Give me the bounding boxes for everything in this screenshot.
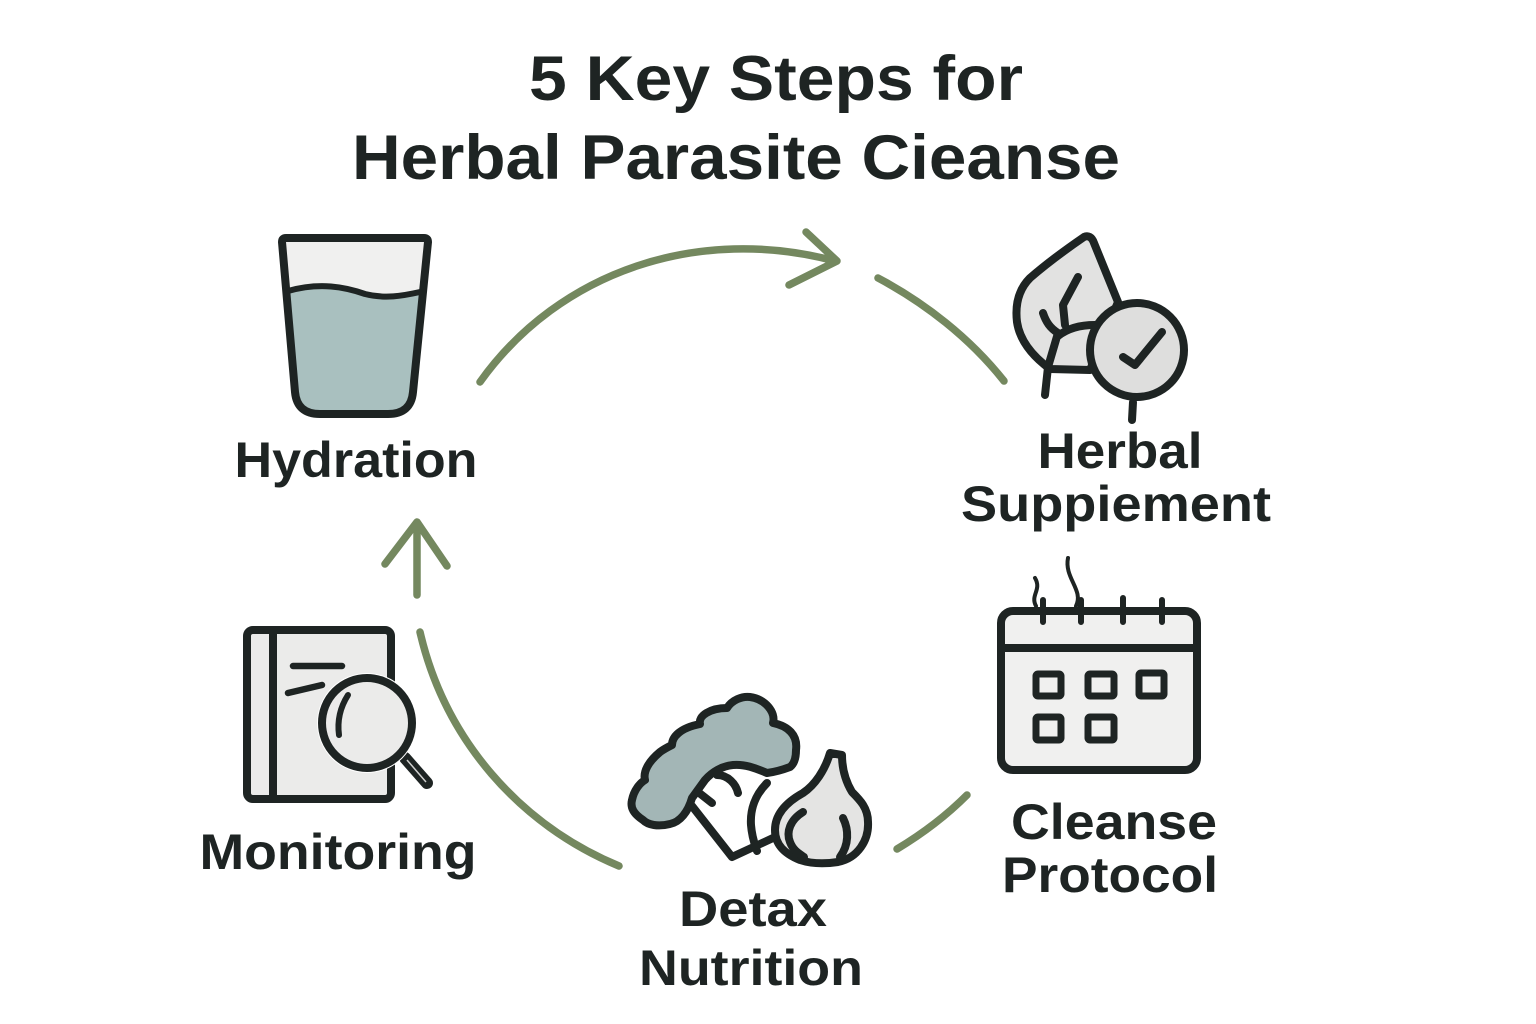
label: cleanse protocol: Protocol: [1002, 847, 1218, 903]
label: monitoring: Monitoring: [200, 824, 476, 880]
label: herbal supplement: [961, 423, 1271, 532]
label: cleanse protocol: Cleanse: [1011, 794, 1217, 850]
arrow: cleanse protocol to detox nutrition: [897, 795, 967, 849]
icon: glass of water: [282, 238, 428, 414]
label: detox nutrition: Nutrition: [639, 940, 863, 996]
icon: broccoli and garlic: [631, 697, 868, 863]
icon: calendar: [1001, 558, 1197, 770]
label: cleanse protocol: [1002, 794, 1218, 903]
label: detox nutrition: [639, 881, 863, 996]
title: 5 Key Steps for: [529, 44, 1023, 114]
icon: notebook with magnifier: [247, 630, 427, 799]
icon: herbal leaf with check badge: [1016, 236, 1184, 420]
title: Herbal Parasite Cieanse: [352, 123, 1120, 193]
title: [352, 44, 1120, 193]
label: herbal supplement: Suppiement: [961, 476, 1271, 532]
arrow: herbal supplement to cleanse protocol: [878, 278, 1004, 381]
label: hydration: Hydration: [234, 432, 478, 488]
label: detox nutrition: Detax: [679, 881, 827, 937]
arrow: monitoring to hydration: [385, 522, 447, 595]
label: herbal supplement: Herbal: [1038, 423, 1202, 479]
arrow: detox nutrition to monitoring: [420, 632, 619, 866]
arrow: hydration to herbal supplement: [480, 232, 837, 382]
